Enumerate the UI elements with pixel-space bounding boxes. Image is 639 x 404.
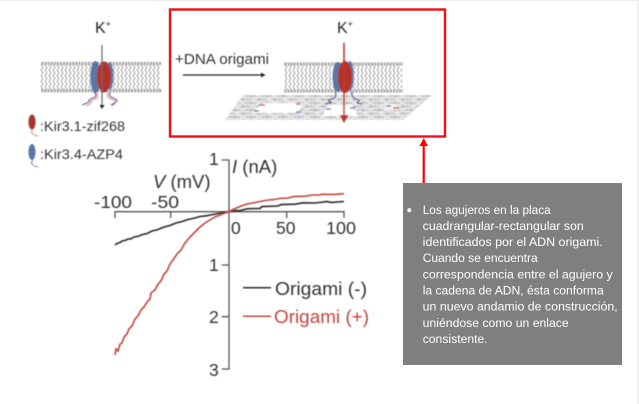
voltage axis xyxy=(115,212,344,218)
voltage tick labels: 100 xyxy=(326,218,356,238)
red frame xyxy=(170,10,445,136)
callout text: la cadena de ADN, ésta conforma xyxy=(423,284,604,298)
panel: channel without DNA origami xyxy=(28,19,161,167)
legend: Origami (-): Origami (-) xyxy=(275,278,367,299)
lipid membrane, left xyxy=(41,64,161,91)
voltage tick labels: -100 xyxy=(94,192,132,212)
ion channel, left xyxy=(82,61,117,106)
current tick labels: 1 xyxy=(209,149,219,169)
callout text: Cuando se encuentra xyxy=(423,251,538,265)
K+ label, left: K xyxy=(95,20,106,37)
curve: Origami (-) xyxy=(115,202,344,245)
voltage tick labels: 0 xyxy=(231,218,241,238)
panel: channel with DNA origami, red frame xyxy=(170,10,445,136)
callout text: Los agujeros en la placa xyxy=(423,203,551,217)
voltage tick labels xyxy=(94,192,356,238)
axis title I (nA): I (nA) xyxy=(232,156,277,177)
current-voltage chart xyxy=(94,149,369,380)
callout text: consistente. xyxy=(423,332,488,346)
reaction arrow xyxy=(183,73,266,77)
lipid membrane, right xyxy=(284,64,403,91)
axis title V (mV): V (mV) xyxy=(153,171,211,192)
ion channel, right xyxy=(325,61,362,104)
legend: Origami (+): Origami (+) xyxy=(274,306,369,327)
current tick labels: 3 xyxy=(209,360,219,380)
current tick labels xyxy=(209,149,219,380)
arrow from callout to red frame xyxy=(420,138,428,183)
callout text: un nuevo andamio de construcción, xyxy=(423,300,618,314)
K+ label, right: K xyxy=(337,20,348,37)
DNA origami plate with holes xyxy=(225,95,432,120)
callout text: correspondencia entre el agujero y xyxy=(423,267,614,281)
voltage tick labels: -50 xyxy=(151,192,179,212)
current tick labels: 1 xyxy=(209,255,219,275)
callout text: identificados por el ADN origami. xyxy=(423,235,603,249)
voltage tick labels: 50 xyxy=(276,218,296,238)
legend: Kir3.4-AZP4 xyxy=(28,144,124,167)
K+ label, left: + xyxy=(106,19,111,29)
K+ label, right: + xyxy=(348,19,353,29)
callout text: uniéndose como un enlace xyxy=(423,316,569,330)
curve: Origami (+) xyxy=(115,194,344,355)
callout text: cuadrangular-rectangular son xyxy=(423,219,584,233)
current axis xyxy=(222,160,229,369)
red flux arrow xyxy=(340,43,348,123)
bullet xyxy=(407,208,411,212)
flux arrow, left xyxy=(100,45,104,109)
current tick labels: 2 xyxy=(209,307,219,327)
legend: Kir3.4-AZP4: :Kir3.4-AZP4 xyxy=(40,147,124,162)
legend: Kir3.1-zif268: :Kir3.1-zif268 xyxy=(40,119,125,134)
+DNA origami label: +DNA origami xyxy=(175,51,269,68)
callout: explanation text box xyxy=(403,183,622,365)
callout text xyxy=(423,203,618,346)
legend: Kir3.1-zif268 xyxy=(28,114,125,136)
